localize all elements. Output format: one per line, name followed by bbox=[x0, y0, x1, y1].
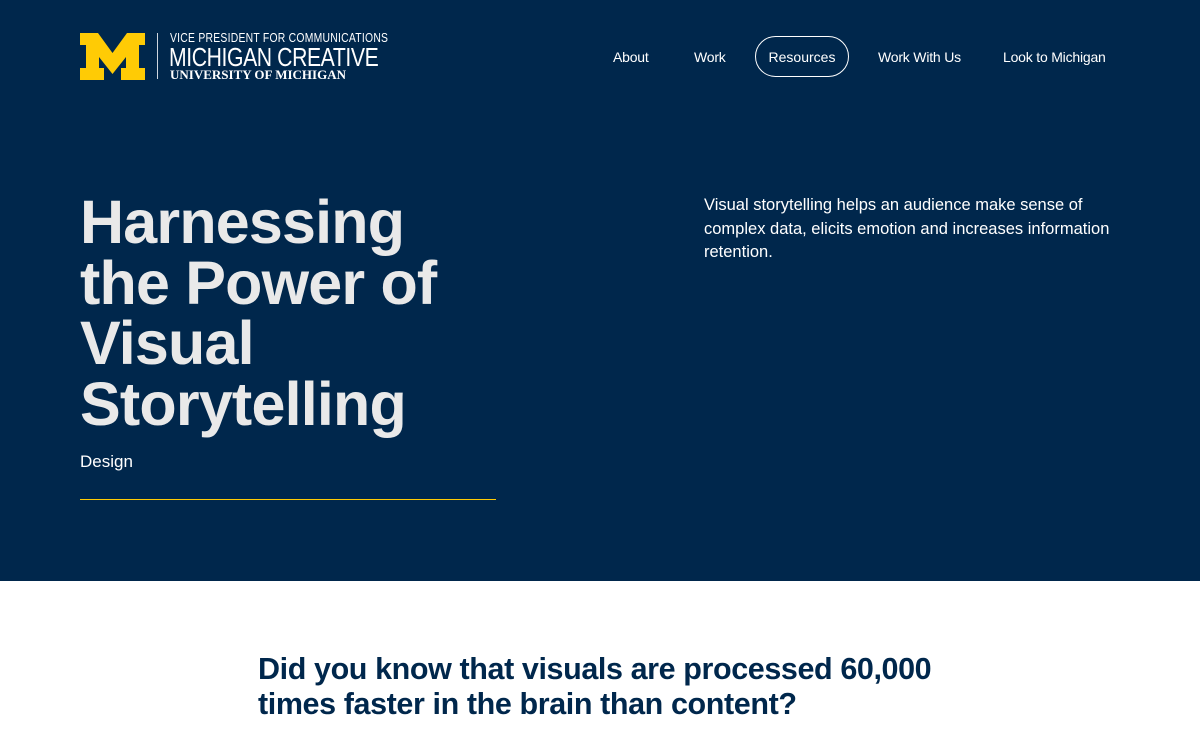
category label: Design bbox=[80, 452, 133, 471]
hero panel: Look to Michigan bbox=[1003, 49, 1106, 65]
hero panel: Work bbox=[694, 49, 726, 65]
title: the Power of bbox=[80, 248, 436, 316]
navigation bbox=[613, 36, 1106, 77]
logo: VICE PRESIDENT FOR COMMUNICATIONS bbox=[170, 31, 388, 45]
logo bbox=[80, 31, 388, 82]
title: Storytelling bbox=[80, 370, 406, 438]
hero panel: About bbox=[613, 49, 649, 65]
heading: fact: Did you know that visuals are processed 60,000 times faster in the brain than content? bbox=[258, 652, 931, 721]
title: Harnessing bbox=[80, 188, 404, 256]
icon: block M bbox=[80, 33, 145, 80]
title bbox=[80, 188, 438, 438]
nav button: Resources: Resources bbox=[769, 49, 835, 65]
hero panel bbox=[0, 0, 1200, 581]
intro text: Visual storytelling helps an audience make sense of complex data, elicits emotion and increases information retention. bbox=[704, 196, 1109, 261]
hero panel: Work With Us bbox=[878, 49, 961, 65]
title: Visual bbox=[80, 309, 254, 377]
logo: UNIVERSITY OF MICHIGAN bbox=[170, 67, 346, 82]
logo: MICHIGAN CREATIVE bbox=[169, 42, 378, 72]
nav button: Resources bbox=[755, 36, 849, 77]
